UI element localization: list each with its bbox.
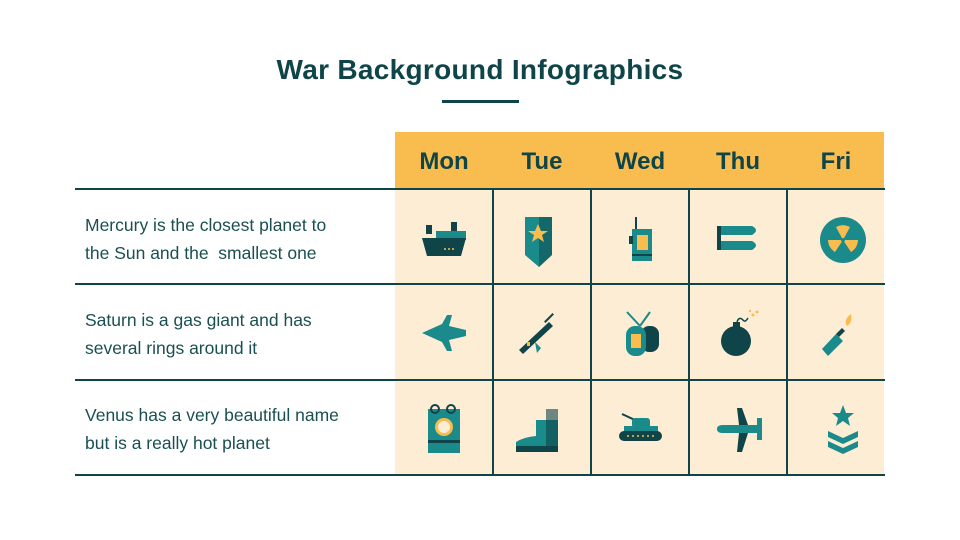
day headers: Wed xyxy=(615,148,665,175)
title underline xyxy=(442,100,519,103)
icon: molotov xyxy=(822,314,852,356)
day headers: Mon xyxy=(419,148,469,175)
row text 1: the Sun and the smallest one xyxy=(85,243,317,263)
icon: rifle xyxy=(519,313,554,354)
icon: dog tags xyxy=(626,312,659,356)
cells background xyxy=(395,189,884,475)
header bar xyxy=(395,132,884,189)
day headers: Fri xyxy=(821,148,851,175)
icon: plane xyxy=(717,408,762,452)
icon: radiation xyxy=(820,217,866,263)
icon: bomb xyxy=(721,310,758,356)
icon: radio xyxy=(629,217,652,261)
icon: chevron badge xyxy=(525,217,552,267)
title: War Background Infographics xyxy=(277,54,683,85)
row text 3: but is a really hot planet xyxy=(85,433,270,453)
row text 1: Mercury is the closest planet to xyxy=(85,215,326,235)
icon: rank star xyxy=(828,405,858,454)
row text 1 xyxy=(85,215,326,263)
icon: boot xyxy=(516,409,558,452)
icon: time bomb xyxy=(428,405,460,453)
row text 2: several rings around it xyxy=(85,338,257,358)
row text 3 xyxy=(85,405,339,453)
icon: ship xyxy=(422,222,466,256)
icon: bullets xyxy=(717,226,756,250)
day headers xyxy=(419,148,851,175)
row text 2: Saturn is a gas giant and has xyxy=(85,310,312,330)
row text 3: Venus has a very beautiful name xyxy=(85,405,339,425)
row text 2 xyxy=(85,310,312,358)
icon: jet xyxy=(422,315,466,351)
day headers: Thu xyxy=(716,148,760,175)
icon: tank xyxy=(619,414,662,441)
day headers: Tue xyxy=(522,148,562,175)
